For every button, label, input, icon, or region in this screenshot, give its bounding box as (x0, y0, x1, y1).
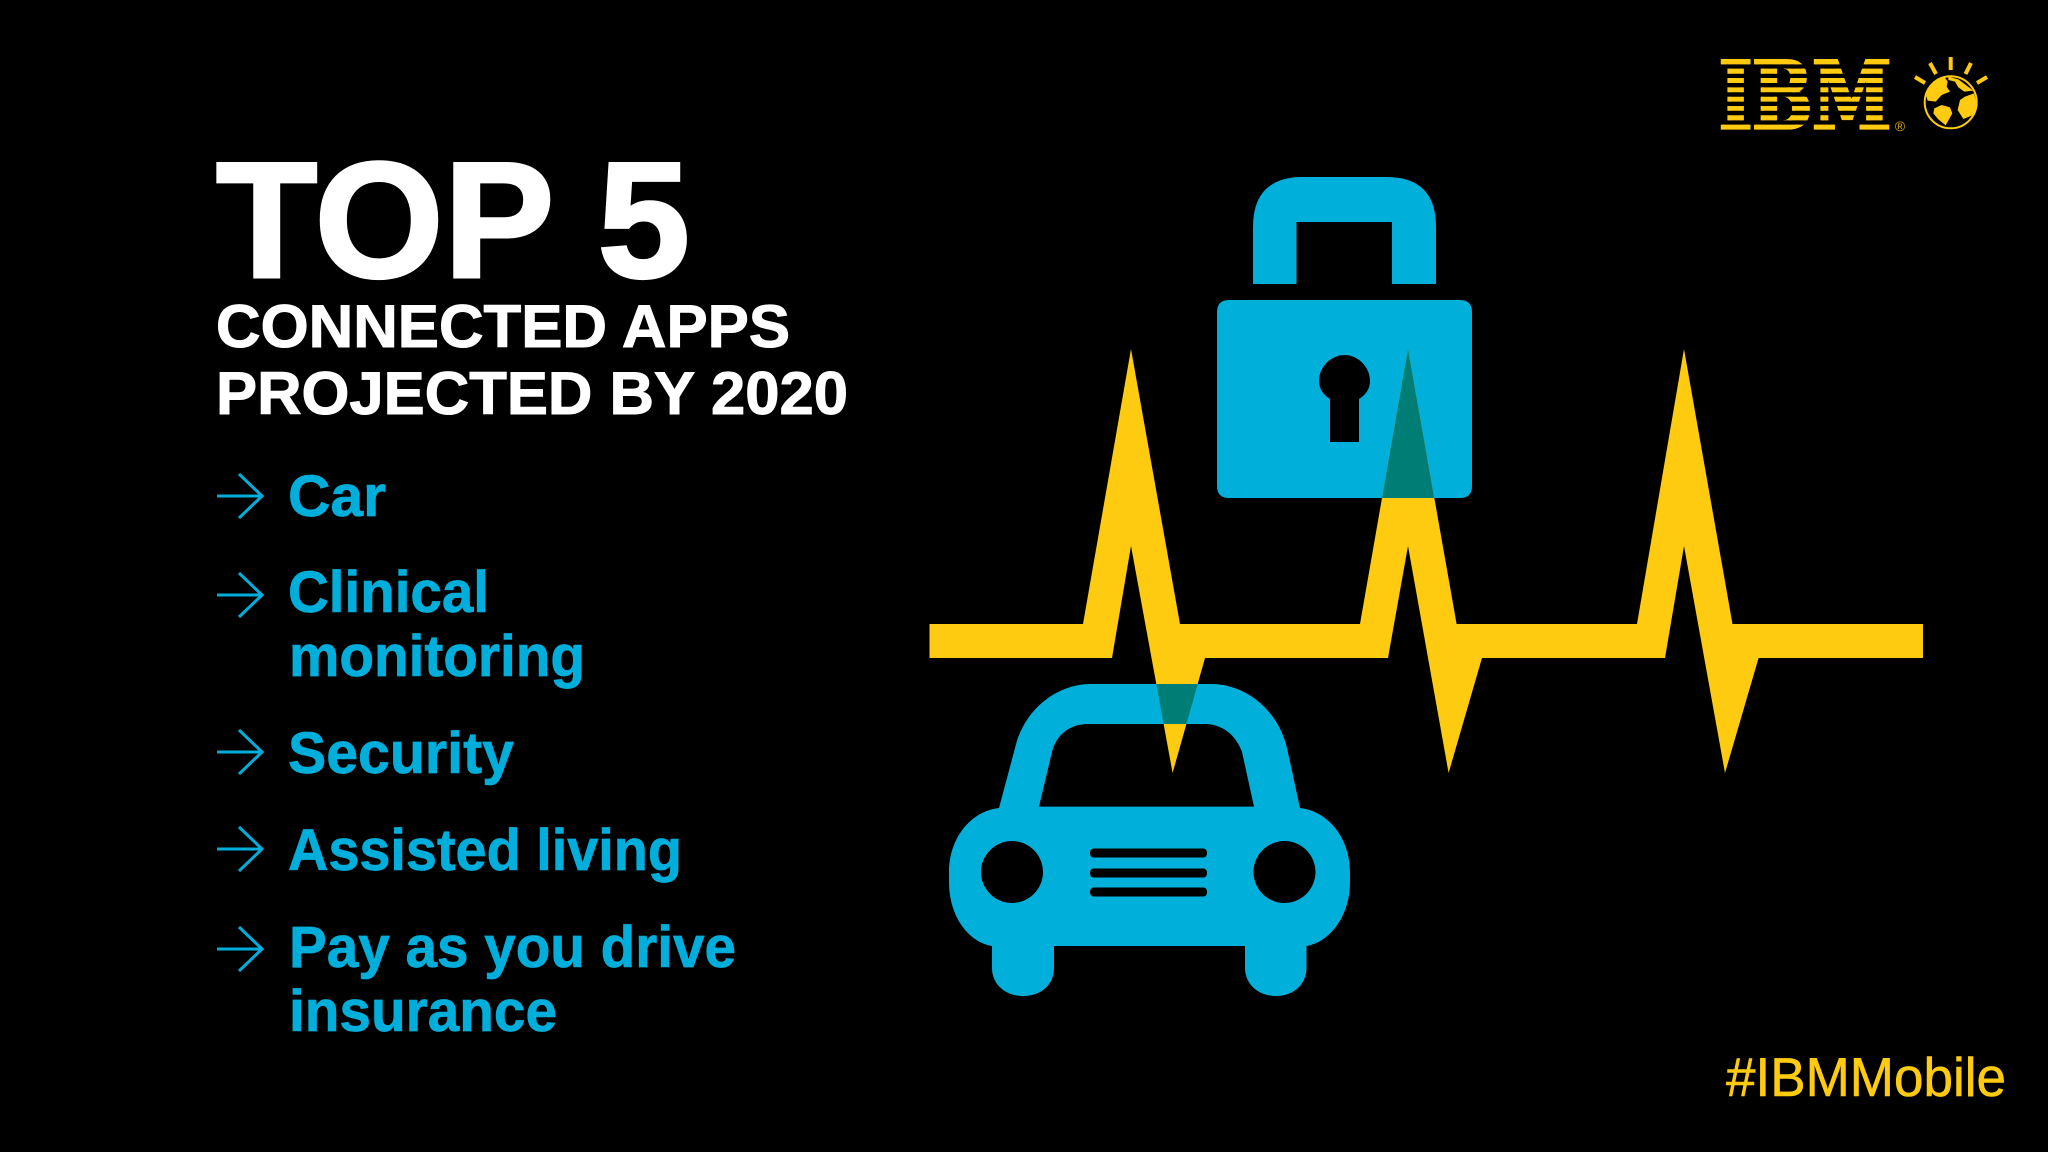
list item: car (217, 464, 386, 529)
overlap: heartbeat over car roof (1156, 684, 1198, 724)
list item: pay as you drive insurance: insurance (289, 979, 557, 1044)
list item: clinical monitoring: monitoring (289, 624, 585, 689)
list item: assisted living: Assisted living (288, 818, 682, 883)
list item: pay as you drive insurance (217, 915, 736, 1044)
registered mark: ® (1895, 118, 1906, 134)
heartbeat line (930, 349, 1923, 773)
list item: car: Car (288, 464, 386, 529)
hashtag: #IBMMobile (1726, 1046, 2006, 1108)
list item: clinical monitoring: Clinical (288, 560, 489, 625)
title: top 5: TOP 5 (216, 128, 690, 312)
globe ring (1925, 76, 1977, 128)
icon: padlock (1217, 177, 1472, 498)
continents (1926, 77, 1977, 125)
rays (1915, 57, 1987, 83)
icon: smarter planet globe (1915, 57, 1987, 128)
overlap: heartbeat over padlock (1382, 349, 1434, 498)
IBM logo (1720, 59, 1905, 132)
subtitle line 1: CONNECTED APPS (216, 293, 790, 360)
list item: pay as you drive insurance: Pay as you drive (289, 915, 736, 980)
logo wordmark: IBM (1719, 42, 1891, 150)
subtitle line 2: PROJECTED BY 2020 (216, 360, 848, 427)
list of apps (217, 464, 736, 1044)
list item: clinical monitoring (217, 560, 585, 689)
icon: car (949, 684, 1350, 996)
list item: security: Security (288, 721, 514, 786)
heading block (216, 128, 848, 427)
